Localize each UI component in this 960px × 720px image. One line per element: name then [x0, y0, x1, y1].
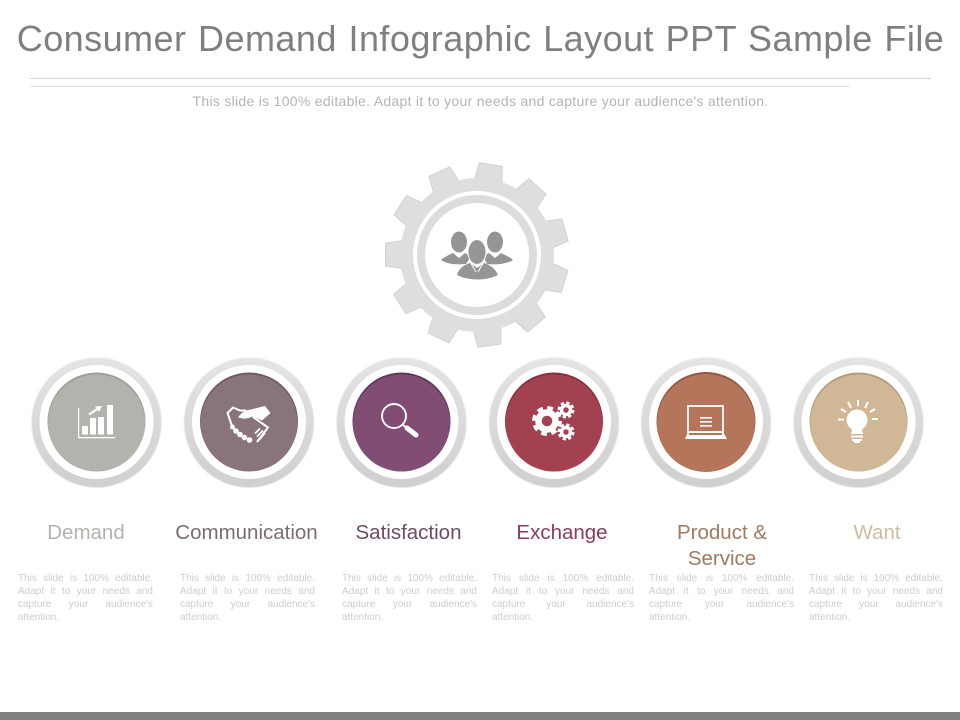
divider: upper rule [30, 78, 931, 80]
subtitle: This slide is 100% editable. Adapt it to your needs and capture your audience's attention. [193, 93, 768, 109]
icon: magnifier [382, 404, 416, 435]
icon: gears [534, 403, 573, 439]
badge: demand [32, 358, 162, 488]
heading: satisfaction: Satisfaction [356, 521, 461, 544]
gear with people icon [385, 162, 569, 348]
icon: bar chart [78, 405, 115, 438]
text: demand: This slide is 100% editable. Adapt it to your needs and capture your audience's attention. [18, 573, 153, 623]
heading: exchange: Exchange [516, 521, 608, 544]
footer bar [0, 712, 960, 720]
text: product and service: This slide is 100% editable. Adapt it to your needs and capture your audience's attention. [649, 573, 794, 623]
badge: product and service [641, 358, 771, 488]
heading: product and service: Product & Service [677, 521, 767, 570]
title: Consumer Demand Infographic Layout PPT Sample File [17, 18, 944, 59]
icon: laptop [685, 406, 727, 439]
badge: want [794, 358, 924, 488]
icon: people [441, 232, 513, 280]
badge: satisfaction [336, 358, 466, 488]
badge: exchange [489, 358, 619, 488]
text: exchange: This slide is 100% editable. Adapt it to your needs and capture your audience's attention. [492, 573, 634, 623]
text: satisfaction: This slide is 100% editable. Adapt it to your needs and capture your audience's attention. [342, 573, 477, 623]
badge: communication [184, 358, 314, 488]
heading: demand: Demand [47, 521, 125, 544]
text: communication: This slide is 100% editable. Adapt it to your needs and capture your audience's attention. [180, 573, 315, 623]
heading: want: Want [853, 521, 901, 544]
icon: handshake [228, 406, 270, 443]
icon: light bulb [838, 400, 878, 443]
gear shape [385, 162, 569, 348]
text: want: This slide is 100% editable. Adapt it to your needs and capture your audience's attention. [809, 573, 943, 623]
divider: lower rule [30, 86, 850, 88]
heading: communication: Communication [175, 521, 318, 544]
